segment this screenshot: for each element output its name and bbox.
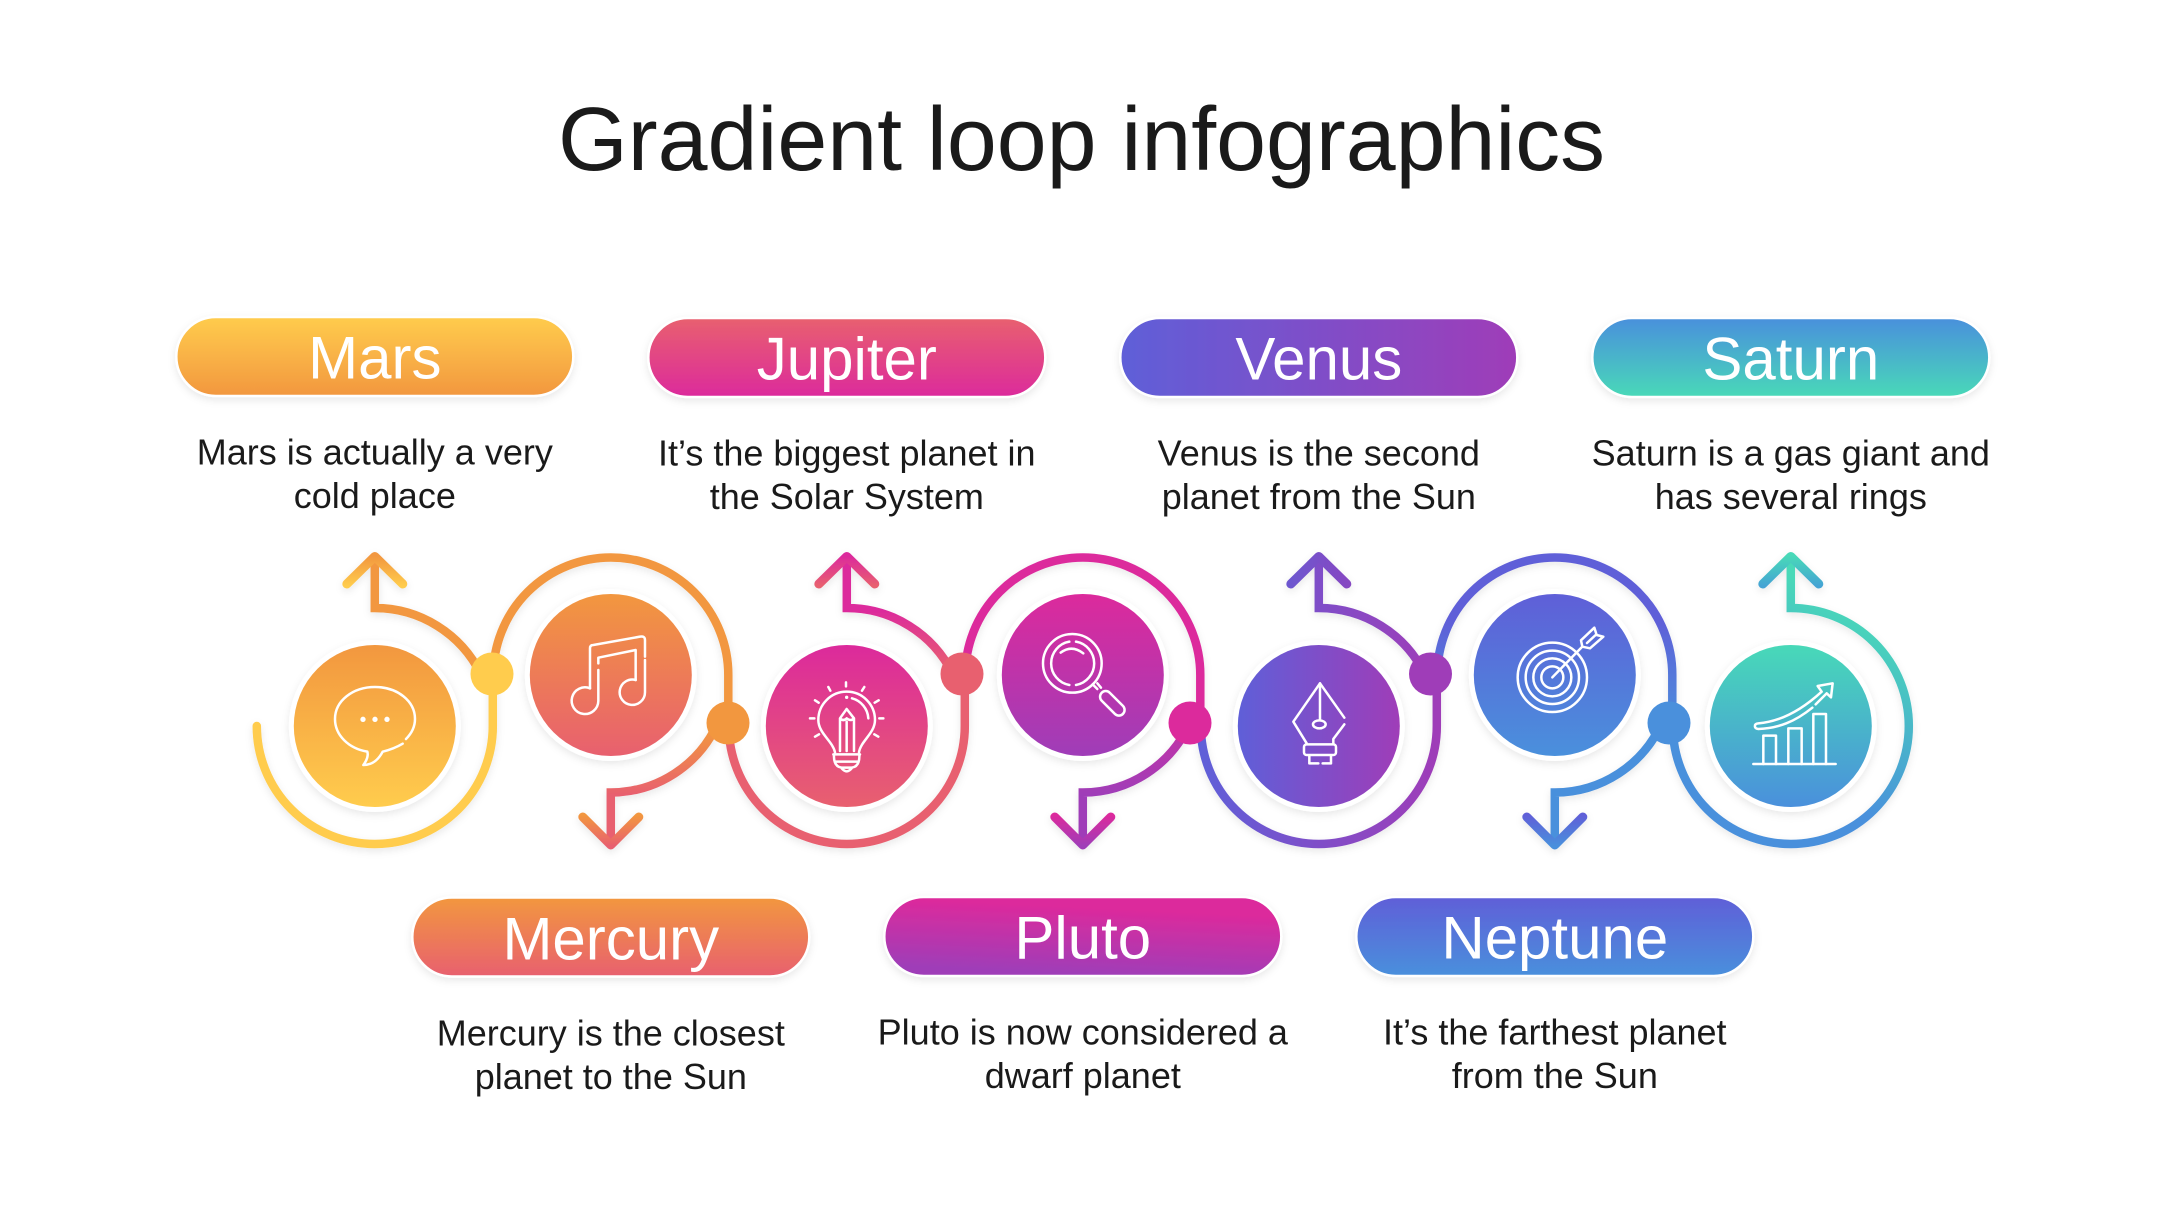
loop: Venus ring and arrow bbox=[1201, 556, 1437, 844]
panel: Mercury: Mercury bbox=[502, 906, 719, 972]
icon disc: Mars speech bubble bbox=[289, 640, 461, 812]
loop: Mercury ring and arrow bbox=[493, 558, 728, 845]
panel: Jupiter: Jupiter bbox=[757, 326, 937, 392]
loop: Neptune ring and arrow bbox=[1437, 558, 1672, 845]
panel: Jupiter: It’s the biggest planet in bbox=[658, 432, 1036, 473]
title: Gradient loop infographics bbox=[558, 90, 1605, 190]
panel: Mercury: planet to the Sun bbox=[475, 1056, 747, 1097]
panel: Mercury bbox=[412, 898, 809, 1097]
loop: Mars ring and arrow bbox=[257, 556, 493, 844]
panel: Mercury: Mercury is the closest bbox=[437, 1012, 785, 1053]
panel: Jupiter: the Solar System bbox=[710, 476, 984, 517]
panel: Neptune: from the Sun bbox=[1452, 1055, 1658, 1096]
panel: Venus: planet from the Sun bbox=[1162, 476, 1476, 517]
loop: Jupiter ring and arrow bbox=[729, 556, 965, 844]
panel: Pluto bbox=[878, 897, 1289, 1096]
panel: Mars: Mars is actually a very bbox=[197, 431, 553, 472]
connector dots bbox=[470, 652, 1690, 744]
panel: Saturn: has several rings bbox=[1655, 476, 1927, 517]
icon disc: Saturn growth chart bbox=[1705, 640, 1877, 812]
loop: Saturn ring and arrow bbox=[1673, 556, 1909, 844]
icon disc: Venus pen nib bbox=[1233, 640, 1405, 812]
panel: Saturn bbox=[1592, 318, 1990, 517]
panel: Neptune: It’s the farthest planet bbox=[1383, 1011, 1727, 1052]
icon disc: Mercury music note bbox=[525, 589, 697, 761]
panel: Jupiter bbox=[648, 318, 1045, 517]
panel: Mars: cold place bbox=[294, 475, 456, 516]
loop: Pluto ring and arrow bbox=[965, 558, 1200, 845]
icon disc: Jupiter light bulb bbox=[761, 640, 933, 812]
icon disc: Neptune target bbox=[1469, 589, 1641, 761]
panel: Pluto: Pluto is now considered a bbox=[878, 1011, 1289, 1052]
panel: Venus bbox=[1120, 318, 1517, 517]
panel: Venus: Venus is the second bbox=[1158, 432, 1480, 473]
panel: Saturn: Saturn is a gas giant and bbox=[1592, 432, 1990, 473]
panel: Pluto: dwarf planet bbox=[985, 1055, 1181, 1096]
panel: Neptune bbox=[1356, 897, 1753, 1096]
panel: Venus: Venus bbox=[1235, 326, 1402, 392]
panel: Neptune: Neptune bbox=[1441, 904, 1668, 972]
icon disc: Pluto magnifier bbox=[997, 589, 1169, 761]
panel: Mars bbox=[176, 317, 573, 516]
panel: Mars: Mars bbox=[308, 324, 441, 392]
panel: Pluto: Pluto bbox=[1014, 904, 1151, 972]
panel: Saturn: Saturn bbox=[1702, 326, 1879, 392]
